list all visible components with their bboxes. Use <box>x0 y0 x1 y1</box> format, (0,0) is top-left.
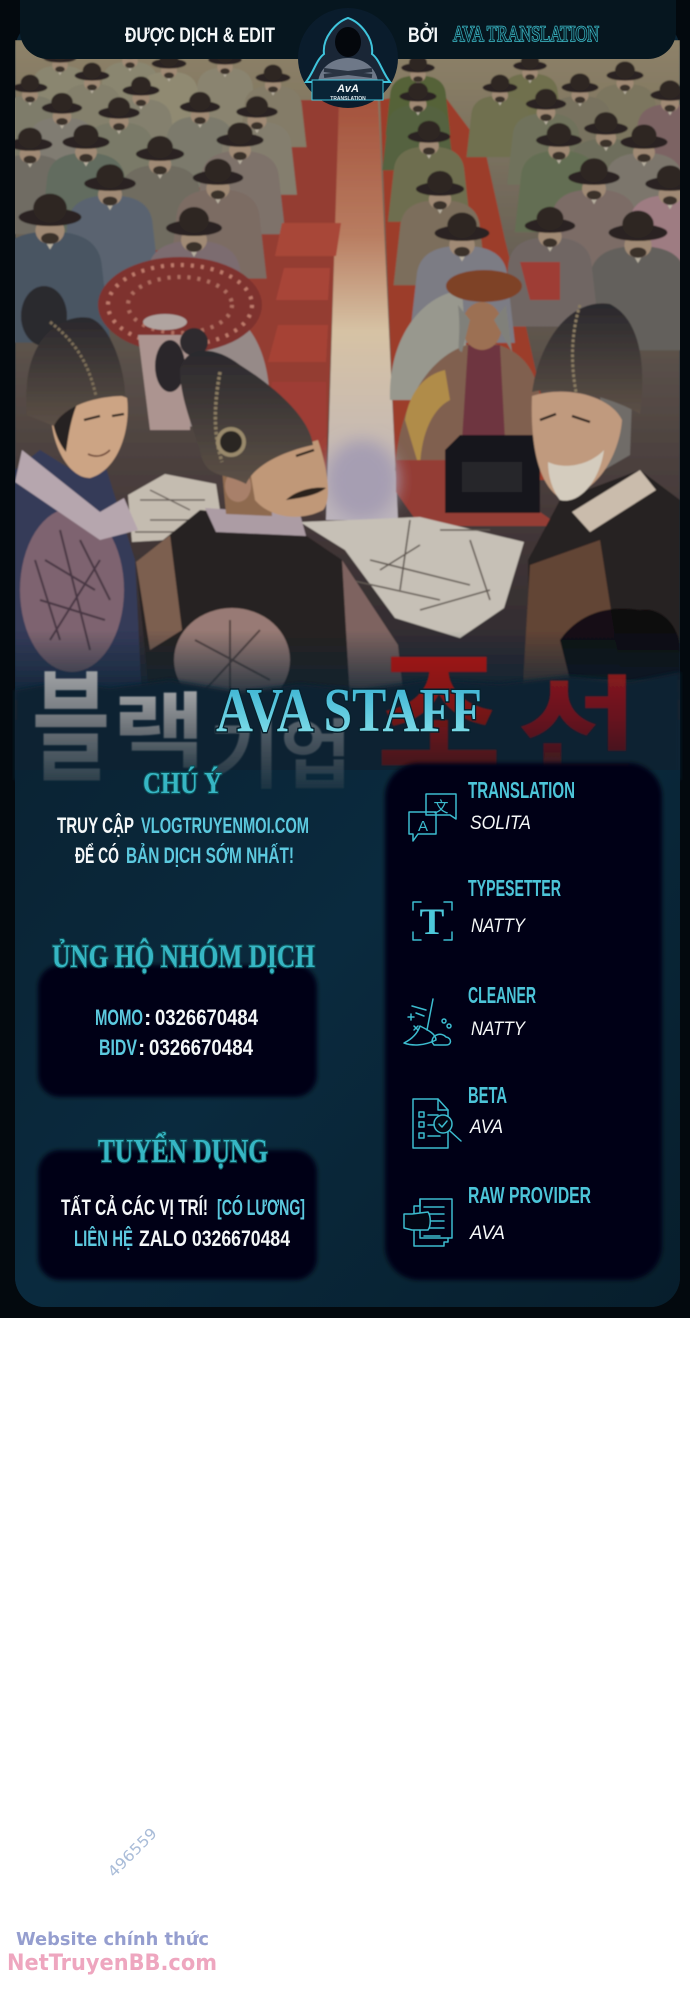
icon: broom <box>404 999 451 1045</box>
logo: hooded figure badge: AvA <box>336 83 359 95</box>
icon: document check <box>413 1099 461 1148</box>
text block: recruiting details: [CÓ LƯƠNG] <box>217 1195 305 1220</box>
title: faded Korean logo: 기업 <box>208 694 352 804</box>
text block: donate details: 0326670484 <box>149 1035 254 1060</box>
panel: donate card <box>38 965 317 1097</box>
dark outer frame <box>0 0 690 1318</box>
credits: typesetter: TYPESETTER <box>468 875 561 901</box>
icon: translation bubbles: A <box>418 818 428 835</box>
header bar <box>20 0 676 59</box>
credits: beta: AVA <box>469 1117 503 1138</box>
credits: raw provider <box>404 1182 591 1246</box>
credits: raw provider: RAW PROVIDER <box>468 1182 591 1208</box>
text block: donate details: : <box>138 1035 145 1060</box>
heading: recruiting: TUYỂN DỤNG <box>98 1132 268 1170</box>
icon: translation bubbles: 文 <box>433 796 449 817</box>
heading: support the group: ỦNG HỘ NHÓM DỊCH <box>52 937 315 975</box>
credits: beta: BETA <box>468 1082 507 1108</box>
panel backdrop below artwork <box>15 770 680 1307</box>
header text: group name: AVA TRANSLATION <box>453 21 599 46</box>
heading: notice: CHÚ Ý <box>143 765 222 800</box>
text block: recruiting details <box>61 1195 305 1251</box>
text block: recruiting details: TẤT CẢ CÁC VỊ TRÍ! <box>61 1195 208 1220</box>
credits: raw provider: AVA <box>469 1223 505 1244</box>
text block: recruiting details: LIÊN HỆ <box>74 1226 133 1251</box>
watermark: website name: NetTruyenBB.com <box>7 1951 217 1976</box>
torn ink edge under artwork <box>15 672 680 780</box>
watermark: id number: 496559 <box>104 1824 161 1881</box>
credits: translation <box>409 777 575 841</box>
panel: main teal backdrop <box>15 20 680 1307</box>
panel: staff credits card <box>385 763 662 1280</box>
text block: donate details: BIDV <box>99 1035 137 1060</box>
text block: donate details: MOMO <box>95 1005 143 1030</box>
title: faded Korean logo <box>32 600 640 810</box>
credits: typesetter <box>413 875 561 943</box>
text block: donate details: : <box>144 1005 151 1030</box>
header text: by: BỞI <box>408 23 438 47</box>
illustration: court scene artwork <box>0 40 690 720</box>
icon: text frame <box>413 902 452 943</box>
title: faded Korean logo: 선 <box>516 639 640 801</box>
credits: translation: SOLITA <box>470 813 531 834</box>
text block: notice message: ĐỂ CÓ <box>75 843 119 868</box>
credits: translation: TRANSLATION <box>468 777 575 803</box>
title: faded Korean logo: 랙 <box>112 665 206 784</box>
credits: cleaner <box>404 982 536 1045</box>
text block: donate details: 0326670484 <box>155 1005 259 1030</box>
icon: translation bubbles <box>409 794 456 841</box>
text block: notice message: TRUY CẬP <box>57 813 134 838</box>
title: faded Korean logo: 조 <box>376 600 502 810</box>
heading: AVA STAFF: AVA STAFF <box>216 677 482 745</box>
icon: stack of pages in hand <box>404 1199 452 1246</box>
header text: translated by: ĐƯỢC DỊCH & EDIT <box>125 24 275 47</box>
text block: notice message <box>57 813 309 868</box>
credits: cleaner: CLEANER <box>468 982 536 1008</box>
credits: cleaner: NATTY <box>471 1019 526 1040</box>
panel: recruiting card <box>38 1150 317 1280</box>
text block: donate details <box>95 1005 259 1060</box>
watermark: website label: Website chính thức <box>16 1929 209 1950</box>
text block: notice message: VLOGTRUYENMOI.COM <box>141 813 309 838</box>
credits: beta <box>413 1082 507 1148</box>
logo: hooded figure badge: TRANSLATION <box>330 96 366 102</box>
text block: notice message: BẢN DỊCH SỚM NHẤT! <box>126 843 294 868</box>
logo: hooded figure badge <box>298 8 398 108</box>
text block: recruiting details: ZALO 0326670484 <box>139 1226 291 1251</box>
icon: text frame: T <box>420 902 445 943</box>
credits: typesetter: NATTY <box>471 916 526 937</box>
title: faded Korean logo: 블 <box>32 631 110 805</box>
